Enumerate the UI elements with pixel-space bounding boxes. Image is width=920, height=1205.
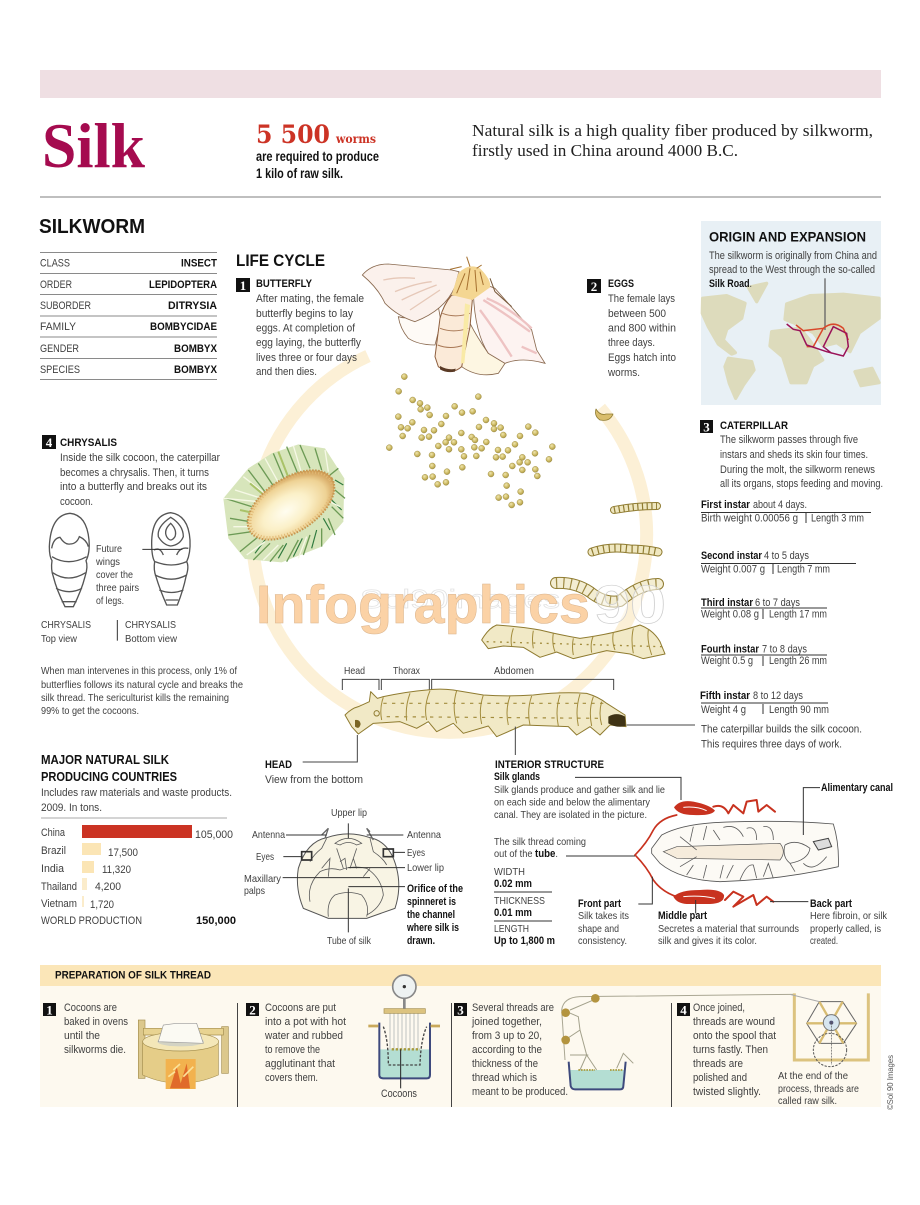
- instar list: Fourth instar: [701, 644, 760, 656]
- step 4: winding: polished and: [693, 1072, 747, 1084]
- head labels: Eyes: [256, 851, 274, 863]
- step 4: winding: At the end of the: [778, 1070, 848, 1082]
- taxonomy table: INSECT: [181, 258, 217, 270]
- step 4: chrysalis text: Top view: [41, 633, 77, 645]
- head labels: Eyes: [407, 847, 425, 859]
- head labels: drawn.: [407, 935, 435, 947]
- step 3: joining threads: 3: [457, 1002, 464, 1018]
- step 2: eggs text: three days.: [608, 337, 655, 349]
- interior structure text: [494, 759, 893, 947]
- interior structure text: Back part: [810, 898, 852, 910]
- step 2: pot: agglutinant that: [265, 1058, 335, 1070]
- panel: origin and expansion: spread to the West through the so-called: [709, 264, 875, 276]
- step 4: chrysalis text: 4: [46, 435, 53, 450]
- step 2: eggs text: Eggs hatch into: [608, 352, 676, 364]
- step 4: winding: called raw silk.: [778, 1095, 837, 1107]
- step 2: pot: 2: [249, 1002, 256, 1018]
- step 4: chrysalis text: of legs.: [96, 595, 124, 607]
- step 1: butterfly text: [236, 278, 364, 378]
- chart: silk producing countries: Vietnam: [41, 898, 77, 910]
- step 4: chrysalis text: Bottom view: [125, 633, 177, 645]
- interior structure text: 0.02 mm: [494, 878, 532, 890]
- step 1: butterfly text: BUTTERFLY: [256, 278, 313, 290]
- taxonomy table: CLASS: [40, 258, 70, 270]
- step 3: caterpillar text: [700, 420, 883, 490]
- icon: spool wheel: [790, 993, 868, 1067]
- step 4: chrysalis text: When man intervenes in this process, only 1% of: [41, 665, 237, 677]
- world map with silk road: [702, 278, 879, 398]
- diagram: head from the bottom: [283, 823, 405, 932]
- instar list: Fifth instar: [700, 690, 751, 702]
- illustration: butterfly: [362, 257, 545, 375]
- illustration: large worms and anatomy brackets: [303, 625, 695, 762]
- instar list: [700, 499, 871, 750]
- watermark: Sol90images: [360, 584, 560, 614]
- chart: silk producing countries: WORLD PRODUCTION: [41, 915, 142, 927]
- step 4: winding: turns fastly. Then: [693, 1044, 768, 1056]
- credit: ©Sol 90 Images: [885, 1055, 895, 1110]
- illustration: chrysalis drawings: [49, 513, 190, 641]
- taxonomy table: SUBORDER: [40, 300, 91, 312]
- chart: silk producing countries: 4,200: [95, 881, 121, 893]
- callout: worms per kilo: worms: [335, 132, 376, 146]
- step 2: pot: Cocoons are put: [265, 1002, 336, 1014]
- taxonomy table: GENDER: [40, 343, 79, 355]
- interior structure text: Silk takes its: [578, 910, 629, 922]
- step 3: caterpillar text: instars and sheds its skin four times.: [720, 449, 868, 461]
- intro text: firstly used in China around 4000 B.C.: [472, 141, 738, 160]
- instar list: The caterpillar builds the silk cocoon.: [701, 724, 862, 736]
- icon: pot with gauge: [368, 975, 440, 1088]
- panel: origin and expansion: [701, 221, 881, 405]
- step 4: chrysalis text: three pairs: [96, 582, 139, 594]
- head section heading: View from the bottom: [265, 774, 363, 786]
- interior structure text: WIDTH: [494, 866, 525, 878]
- step 3: caterpillar text: The silkworm passes through five: [720, 434, 858, 446]
- panel: origin and expansion: ORIGIN AND EXPANSION: [709, 228, 866, 244]
- step 2: pot: to remove the: [265, 1044, 320, 1056]
- taxonomy table: DITRYSIA: [168, 300, 217, 312]
- taxonomy table: LEPIDOPTERA: [149, 279, 217, 291]
- step 4: chrysalis text: Inside the silk cocoon, the caterpillar: [60, 452, 220, 464]
- step 2: eggs text: between 500: [608, 308, 666, 320]
- life cycle ring: [253, 356, 647, 732]
- step 2: pot: covers them.: [265, 1072, 318, 1084]
- head labels: the channel: [407, 909, 455, 921]
- interior structure text: on each side and below the alimentary: [494, 796, 651, 808]
- chart: silk producing countries: India: [41, 863, 65, 875]
- step 4: chrysalis text: into a butterfly and breaks out its: [60, 481, 207, 493]
- chart: silk producing countries: MAJOR NATURAL SILK: [41, 753, 169, 767]
- panel: preparation of silk thread: PREPARATION OF SILK THREAD: [55, 970, 211, 982]
- taxonomy table: BOMBYX: [174, 343, 218, 355]
- taxonomy table: [40, 252, 218, 380]
- chart: silk producing countries: PRODUCING COUNTRIES: [41, 770, 177, 784]
- interior structure text: Up to 1,800 m: [494, 935, 555, 947]
- step 1: oven: Cocoons are: [64, 1002, 117, 1014]
- illustration: cocoon: [223, 444, 346, 562]
- interior structure text: shape and: [578, 923, 619, 935]
- step 1: butterfly text: eggs. At completion of: [256, 322, 356, 334]
- interior structure text: Silk glands: [494, 771, 540, 783]
- head labels: spinneret is: [407, 896, 456, 908]
- head labels: Upper lip: [331, 807, 367, 819]
- watermark: Infographics: [256, 575, 590, 635]
- chart: silk producing countries: 2009. In tons.: [41, 802, 102, 814]
- instar list: Length 7 mm: [777, 564, 830, 576]
- interior structure text: silk and gives it its color.: [658, 935, 757, 947]
- step 3: joining threads: thread which is: [472, 1072, 537, 1084]
- head labels: Lower lip: [407, 862, 444, 874]
- taxonomy table: ORDER: [40, 279, 72, 291]
- brackets: [342, 679, 614, 690]
- step 3: joining threads: from 3 up to 20,: [472, 1030, 542, 1042]
- step 3: caterpillar text: CATERPILLAR: [720, 420, 788, 432]
- chart: silk producing countries: China: [41, 827, 66, 839]
- step 1: oven: 1: [46, 1002, 53, 1018]
- callout: worms per kilo: 5 500: [256, 120, 330, 149]
- chart: silk producing countries: 1,720: [90, 899, 114, 911]
- step 1: butterfly text: butterfly begins to lay: [256, 308, 353, 320]
- head labels: Antenna: [252, 829, 285, 841]
- step 4: winding: 4: [680, 1002, 687, 1018]
- step 4: chrysalis text: wings: [95, 556, 120, 568]
- step 4: chrysalis text: CHRYSALIS: [125, 619, 176, 631]
- step 4: winding: threads are wound: [693, 1016, 775, 1028]
- interior structure text: Secretes a material that surrounds: [658, 923, 799, 935]
- step 3: joining threads: meant to be produced.: [472, 1086, 568, 1098]
- instar list: Second instar: [701, 550, 763, 562]
- chart: silk producing countries: Includes raw materials and waste products.: [41, 787, 232, 799]
- chart: silk producing countries: [41, 753, 236, 927]
- taxonomy table: BOMBYX: [174, 364, 218, 376]
- heading: life cycle: LIFE CYCLE: [236, 251, 325, 270]
- interior structure text: created.: [810, 935, 838, 947]
- interior structure text: Alimentary canal: [821, 782, 893, 794]
- illustration: eggs: [386, 374, 555, 508]
- callout: worms per kilo: 1 kilo of raw silk.: [256, 165, 343, 181]
- chart: silk producing countries: 105,000: [195, 829, 233, 841]
- instar list: Weight 0.007 g: [701, 564, 765, 576]
- step 4: winding: [677, 993, 868, 1107]
- icon: oven: [138, 1020, 228, 1089]
- step 2: eggs text: worms.: [607, 367, 640, 379]
- step 2: pot: into a pot with hot: [265, 1016, 346, 1028]
- title: Silk: [42, 110, 145, 181]
- step 4: winding: twisted slightly.: [693, 1086, 761, 1098]
- instar list: Birth weight 0.00056 g: [701, 512, 798, 524]
- interior structure text: consistency.: [578, 935, 627, 947]
- step 3: caterpillar text: 3: [703, 420, 710, 434]
- interior structure text: Middle part: [658, 910, 707, 922]
- interior structure text: Here fibroin, or silk: [810, 910, 888, 922]
- step 2: eggs text: The female lays: [608, 293, 675, 305]
- step 4: winding: process, threads are: [778, 1083, 859, 1095]
- interior structure text: Silk glands produce and gather silk and lie: [494, 784, 665, 796]
- step 4: chrysalis text: becomes a chrysalis. Then, it turns: [60, 467, 209, 479]
- step 4: chrysalis text: CHRYSALIS: [60, 437, 117, 449]
- chart: silk producing countries: Brazil: [41, 845, 66, 857]
- callout: worms per kilo: are required to produce: [256, 148, 379, 164]
- taxonomy table: FAMILY: [40, 321, 77, 333]
- head labels: [244, 807, 463, 947]
- step 2: eggs text: 2: [591, 279, 597, 294]
- fourth instar worm: [482, 625, 665, 659]
- step 2: pot: water and rubbed: [264, 1030, 343, 1042]
- step 3: joining threads: according to the: [472, 1044, 542, 1056]
- step 4: chrysalis text: CHRYSALIS: [41, 619, 91, 631]
- panel: preparation of silk thread: [40, 965, 881, 1107]
- step 4: chrysalis text: Future: [96, 543, 122, 555]
- panel: origin and expansion: Silk Road.: [709, 278, 752, 290]
- step 2: pot: [246, 975, 440, 1100]
- icon: threading machine: [561, 994, 793, 1089]
- head labels: Tube of silk: [327, 935, 372, 947]
- step 4: winding: onto the spool that: [693, 1030, 776, 1042]
- step 2: eggs text: EGGS: [608, 278, 634, 290]
- instar list: about 4 days.: [753, 499, 807, 511]
- head section heading: [265, 759, 363, 786]
- interior structure text: properly called, is: [810, 923, 881, 935]
- anatomy labels: Thorax: [393, 665, 421, 677]
- interior structure text: canal. They are isolated in the picture.: [494, 809, 647, 821]
- instar list: Third instar: [701, 597, 754, 609]
- anatomy labels: Head: [344, 665, 365, 677]
- callout: worms per kilo: [256, 120, 379, 181]
- interior structure text: INTERIOR STRUCTURE: [495, 759, 604, 771]
- panel: origin and expansion: The silkworm is originally from China and: [709, 250, 877, 262]
- interior structure text: THICKNESS: [494, 895, 545, 907]
- step 1: butterfly text: lives three or four days: [256, 352, 357, 364]
- step 1: butterfly text: After mating, the female: [256, 293, 364, 305]
- step 3: joining threads: joined together,: [471, 1016, 542, 1028]
- head labels: Maxillary: [244, 873, 282, 885]
- taxonomy table: BOMBYCIDAE: [150, 321, 217, 333]
- instar list: Weight 4 g: [701, 704, 746, 716]
- step 2: pot: Cocoons: [381, 1088, 417, 1100]
- chart: silk producing countries: Thailand: [41, 881, 77, 893]
- intro text: Natural silk is a high quality fiber produced by silkworm,: [472, 121, 873, 140]
- instar list: 7 to 8 days: [762, 644, 807, 656]
- interior structure text: LENGTH: [494, 923, 529, 935]
- leaders: [303, 725, 695, 762]
- anatomy labels: Abdomen: [494, 665, 534, 677]
- step 4: chrysalis text: cocoon.: [60, 496, 93, 508]
- cocoon body: [236, 456, 346, 554]
- head labels: Orifice of the: [407, 883, 463, 895]
- step 1: oven: until the: [64, 1030, 100, 1042]
- step 3: joining threads: Several threads are: [472, 1002, 554, 1014]
- head labels: palps: [244, 885, 265, 897]
- step 1: butterfly text: and then dies.: [256, 366, 317, 378]
- instar list: 8 to 12 days: [753, 690, 803, 702]
- step 4: winding: threads are: [693, 1058, 743, 1070]
- instar list: Weight 0.5 g: [701, 655, 753, 667]
- intro text: [472, 121, 873, 160]
- watermark: 90: [594, 575, 666, 635]
- instar list: First instar: [701, 499, 751, 511]
- anatomy labels: [344, 665, 534, 677]
- taxonomy table: SPECIES: [40, 364, 80, 376]
- diagram: interior structure: [566, 777, 838, 913]
- instar list: Length 3 mm: [811, 512, 864, 524]
- interior structure text: Front part: [578, 898, 621, 910]
- chart: silk producing countries: 17,500: [108, 847, 138, 859]
- illustration: small worms, first to third instar: [556, 409, 658, 602]
- step 1: oven: [43, 1002, 228, 1089]
- fifth instar worm: [345, 689, 626, 737]
- instar list: 4 to 5 days: [764, 550, 809, 562]
- interior structure text: The silk thread coming: [494, 836, 586, 848]
- step 3: caterpillar text: all its organs, stops feeding and moving.: [720, 478, 883, 490]
- heading: silkworm: SILKWORM: [39, 216, 145, 238]
- step 2: eggs text: and 800 within: [608, 322, 676, 334]
- chart: silk producing countries: 11,320: [102, 864, 131, 876]
- instar list: Length 90 mm: [769, 704, 829, 716]
- interior structure text: out of the tube.: [494, 848, 558, 860]
- chart: silk producing countries: 150,000: [196, 915, 236, 927]
- step 3: joining threads: [454, 994, 793, 1098]
- interior structure text: 0.01 mm: [494, 907, 532, 919]
- instar list: Length 17 mm: [769, 608, 827, 620]
- step 4: chrysalis text: 99% to get the cocoons.: [41, 705, 139, 717]
- instar list: Weight 0.08 g: [701, 608, 759, 620]
- step 1: butterfly text: 1: [240, 278, 246, 293]
- step 1: oven: silkworms die.: [64, 1044, 126, 1056]
- head labels: where silk is: [406, 922, 459, 934]
- instar list: This requires three days of work.: [701, 738, 842, 750]
- head section heading: HEAD: [265, 759, 292, 771]
- instar list: 6 to 7 days: [755, 597, 800, 609]
- step 4: chrysalis text: silk thread. The sericulturist kills the remaining: [41, 692, 229, 704]
- step 4: chrysalis text: [41, 435, 243, 717]
- step 1: butterfly text: egg laying, the butterfly: [256, 337, 361, 349]
- instar list: Length 26 mm: [769, 655, 827, 667]
- step 3: caterpillar text: During the molt, the silkworm renews: [720, 464, 875, 476]
- step 4: chrysalis text: cover the: [96, 569, 133, 581]
- step 4: winding: Once joined,: [693, 1002, 745, 1014]
- step 2: eggs text: [587, 278, 676, 379]
- top banner: [40, 70, 881, 98]
- head labels: Antenna: [407, 829, 441, 841]
- step 4: chrysalis text: butterflies follows its natural cycle and breaks the: [41, 679, 243, 691]
- step 3: joining threads: thickness of the: [472, 1058, 538, 1070]
- step 1: oven: baked in ovens: [64, 1016, 128, 1028]
